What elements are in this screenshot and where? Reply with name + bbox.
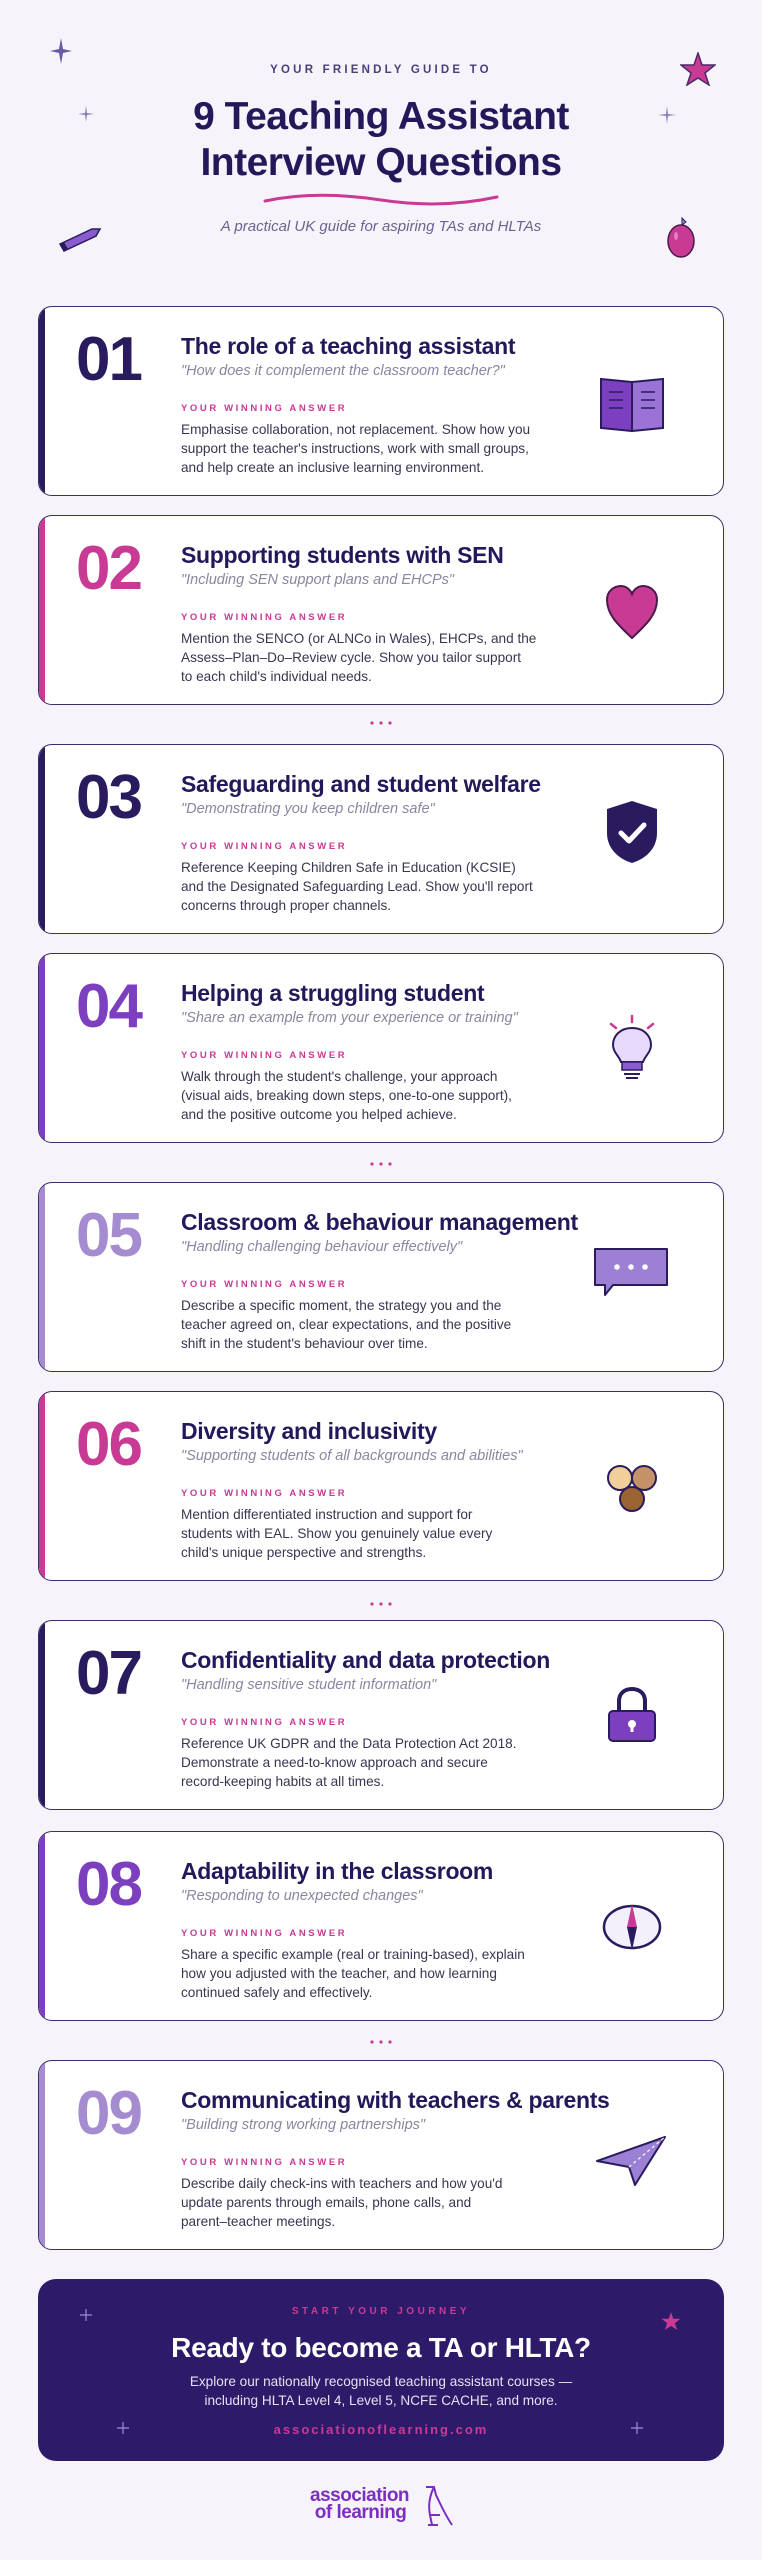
card 03	[38, 744, 724, 934]
card 02	[38, 515, 724, 705]
answer text: students with EAL. Show you genuinely value every	[181, 1526, 492, 1541]
title: 9 Teaching Assistant	[193, 95, 569, 138]
answer text	[181, 860, 533, 913]
icon: padlock	[608, 1687, 656, 1742]
answer text: Demonstrate a need-to-know approach and secure	[181, 1755, 488, 1770]
card title: Classroom & behaviour management	[181, 1209, 578, 1235]
answer text: record-keeping habits at all times.	[181, 1774, 384, 1789]
answer text: support the teacher's instructions, work with small groups,	[181, 441, 529, 456]
card title: Helping a struggling student	[181, 980, 484, 1006]
answer label: YOUR WINNING ANSWER	[181, 2157, 347, 2168]
wave underline	[264, 194, 498, 206]
dots divider	[370, 1602, 392, 1606]
question: "Responding to unexpected changes"	[181, 1888, 423, 1904]
answer text: teacher agreed on, clear expectations, and the positive	[181, 1317, 511, 1332]
answer text: shift in the student's behaviour over time.	[181, 1336, 428, 1351]
star	[662, 2312, 680, 2330]
answer text	[181, 631, 536, 684]
card title: Supporting students with SEN	[181, 542, 504, 568]
answer text: (visual aids, breaking down steps, one-to-one support),	[181, 1088, 512, 1103]
dots divider	[370, 721, 392, 725]
icon: heart	[606, 585, 658, 640]
card 01	[38, 306, 724, 496]
answer text	[181, 1507, 492, 1560]
number 05: 05	[76, 1201, 141, 1270]
answer text: and help create an inclusive learning environment.	[181, 460, 484, 475]
icon: star top-right	[680, 52, 716, 86]
CTA url: associationoflearning.com	[274, 2422, 488, 2437]
card title: Confidentiality and data protection	[181, 1647, 550, 1673]
logo	[310, 2485, 453, 2526]
answer text	[181, 1298, 511, 1351]
subtitle: A practical UK guide for aspiring TAs and HLTAs	[221, 218, 541, 235]
icon: apple	[667, 216, 695, 258]
answer label: YOUR WINNING ANSWER	[181, 1279, 347, 1290]
dots divider	[370, 2040, 392, 2044]
answer text: Describe a specific moment, the strategy you and the	[181, 1298, 501, 1313]
answer text: Emphasise collaboration, not replacement. Show how you	[181, 422, 530, 437]
icon: paper plane	[596, 2136, 666, 2186]
question: "Handling sensitive student information"	[181, 1677, 436, 1693]
card 07	[38, 1620, 724, 1810]
answer text: how you adjusted with the teacher, and how learning	[181, 1966, 497, 1981]
answer text: concerns through proper channels.	[181, 898, 391, 913]
number 07: 07	[76, 1639, 141, 1708]
card 06	[38, 1391, 724, 1581]
CTA kicker: START YOUR JOURNEY	[292, 2306, 470, 2317]
sparkle	[117, 2422, 129, 2434]
answer text: Describe daily check-ins with teachers and how you'd	[181, 2176, 502, 2191]
answer text: update parents through emails, phone calls, and	[181, 2195, 471, 2210]
number 09: 09	[76, 2079, 141, 2148]
card title: Diversity and inclusivity	[181, 1418, 437, 1444]
number 08: 08	[76, 1850, 141, 1919]
logo owl	[426, 2486, 453, 2526]
card title: Safeguarding and student welfare	[181, 771, 541, 797]
answer label: YOUR WINNING ANSWER	[181, 1050, 347, 1061]
logo text	[310, 2485, 409, 2523]
icon: book	[600, 378, 664, 432]
logo text: of learning	[315, 2502, 406, 2523]
icon: sparkle left	[78, 106, 94, 122]
answer text: parent–teacher meetings.	[181, 2214, 335, 2229]
card title: Communicating with teachers & parents	[181, 2087, 610, 2113]
answer label: YOUR WINNING ANSWER	[181, 1717, 347, 1728]
CTA panel	[38, 2279, 724, 2461]
answer text: child's unique perspective and strengths.	[181, 1545, 426, 1560]
question: "How does it complement the classroom teacher?"	[181, 363, 505, 379]
card 09	[38, 2060, 724, 2250]
icon: lightbulb	[610, 1014, 654, 1079]
sparkle	[631, 2422, 643, 2434]
answer text: and the positive outcome you helped achieve.	[181, 1107, 457, 1122]
header kicker: YOUR FRIENDLY GUIDE TO	[270, 64, 492, 76]
answer text: Reference UK GDPR and the Data Protection Act 2018.	[181, 1736, 516, 1751]
answer text	[181, 422, 530, 475]
card title: Adaptability in the classroom	[181, 1858, 493, 1884]
answer text: to each child's individual needs.	[181, 669, 372, 684]
question: "Building strong working partnerships"	[181, 2117, 425, 2133]
answer text	[181, 1069, 512, 1122]
answer text	[181, 2176, 502, 2229]
card 04	[38, 953, 724, 1143]
answer text: Reference Keeping Children Safe in Education (KCSIE)	[181, 860, 516, 875]
sparkle	[80, 2309, 92, 2321]
CTA text: including HLTA Level 4, Level 5, NCFE CACHE, and more.	[204, 2393, 558, 2408]
icon: sparkle right	[658, 106, 676, 124]
CTA heading: Ready to become a TA or HLTA?	[171, 2332, 591, 2363]
answer text	[181, 1947, 525, 2000]
icon: compass	[602, 1904, 662, 1950]
number 03: 03	[76, 763, 141, 832]
number 01: 01	[76, 325, 141, 394]
answer label: YOUR WINNING ANSWER	[181, 1488, 347, 1499]
answer text	[181, 1736, 516, 1789]
title: Interview Questions	[200, 141, 562, 184]
answer label: YOUR WINNING ANSWER	[181, 841, 347, 852]
CTA text: Explore our nationally recognised teaching assistant courses —	[190, 2374, 572, 2389]
answer text: Walk through the student's challenge, your approach	[181, 1069, 497, 1084]
answer text: Assess–Plan–Do–Review cycle. Show you tailor support	[181, 650, 521, 665]
answer text: Share a specific example (real or training-based), explain	[181, 1947, 525, 1962]
icon: pencil	[59, 228, 102, 252]
logo text: association	[310, 2485, 409, 2506]
answer text: Mention the SENCO (or ALNCo in Wales), EHCPs, and the	[181, 631, 536, 646]
icon: sparkle top-left	[50, 38, 72, 64]
CTA text	[190, 2374, 572, 2408]
number 06: 06	[76, 1410, 141, 1479]
icon: speech bubble	[594, 1248, 668, 1296]
question: "Including SEN support plans and EHCPs"	[181, 572, 454, 588]
question: "Supporting students of all backgrounds and abilities"	[181, 1448, 523, 1464]
answer text: Mention differentiated instruction and support for	[181, 1507, 472, 1522]
question: "Demonstrating you keep children safe"	[181, 801, 435, 817]
question: "Handling challenging behaviour effectively"	[181, 1239, 462, 1255]
card 08	[38, 1831, 724, 2021]
card title: The role of a teaching assistant	[181, 333, 515, 359]
title	[193, 95, 569, 184]
answer label: YOUR WINNING ANSWER	[181, 612, 347, 623]
icon: shield	[607, 801, 657, 863]
card 05	[38, 1182, 724, 1372]
number 02: 02	[76, 534, 141, 603]
icon: diverse circles	[607, 1465, 657, 1512]
answer text: continued safely and effectively.	[181, 1985, 372, 2000]
dots divider	[370, 1162, 392, 1166]
number 04: 04	[76, 972, 141, 1041]
answer label: YOUR WINNING ANSWER	[181, 403, 347, 414]
answer text: and the Designated Safeguarding Lead. Show you'll report	[181, 879, 533, 894]
answer label: YOUR WINNING ANSWER	[181, 1928, 347, 1939]
question: "Share an example from your experience or training"	[181, 1010, 518, 1026]
